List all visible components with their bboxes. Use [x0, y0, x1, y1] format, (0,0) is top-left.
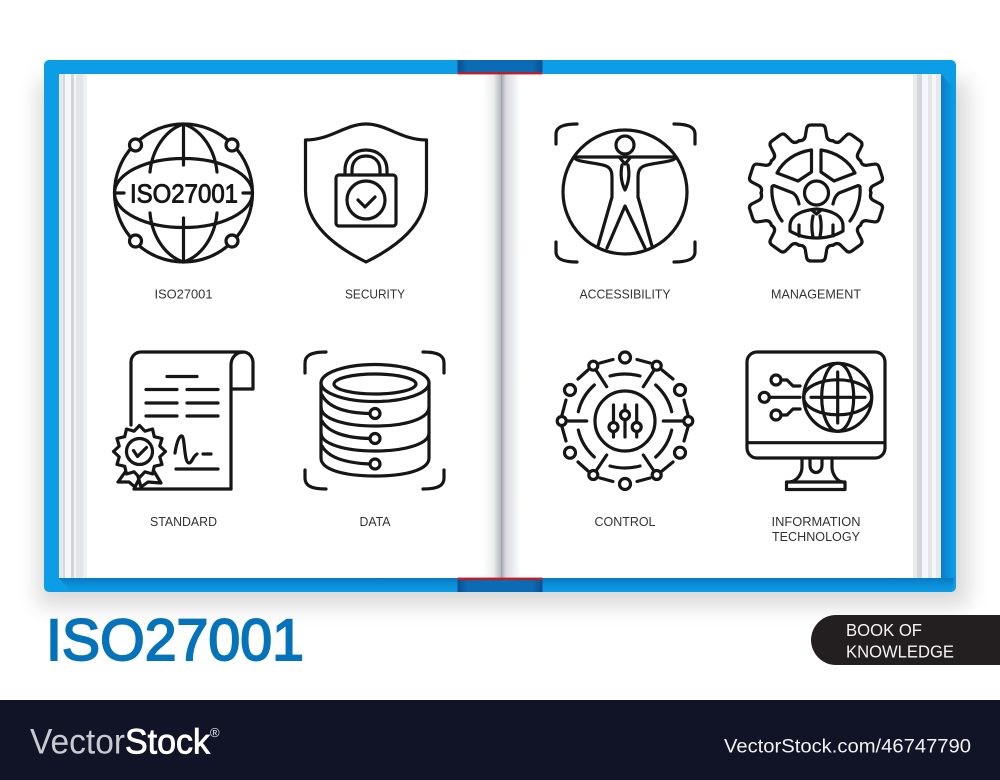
- label: control: CONTROL: [594, 515, 656, 529]
- title: ISO27001: [46, 608, 304, 673]
- book: [44, 60, 956, 592]
- icon: data cylinder: [305, 352, 444, 489]
- left page fold shadow: [482, 74, 501, 578]
- label: information technology: INFORMATION: [772, 515, 860, 529]
- label: security: SECURITY: [345, 288, 406, 302]
- blue cover: [44, 60, 956, 592]
- label: management: MANAGEMENT: [771, 288, 861, 302]
- right page stack: [913, 74, 941, 578]
- label: ISO27001: ISO27001: [154, 288, 213, 302]
- bottom spine band: [458, 578, 542, 592]
- icon: security shield with padlock: [306, 124, 426, 262]
- icon: information technology monitor: [747, 352, 885, 490]
- label: accessibility: ACCESSIBILITY: [580, 288, 671, 302]
- gear teeth: [746, 125, 886, 261]
- footer logo: ®: [210, 725, 220, 740]
- footer logo: Stock: [125, 722, 210, 762]
- right page fold shadow: [501, 74, 521, 578]
- pill: book of knowledge: BOOK OF: [846, 620, 922, 640]
- icon: standard document with badge: [114, 352, 253, 489]
- label: data: DATA: [360, 515, 391, 529]
- right inner cover shade: [941, 74, 954, 578]
- icon: ISO27001 globe: [114, 124, 252, 262]
- icon: control network: [557, 352, 693, 490]
- label: standard: STANDARD: [150, 515, 217, 529]
- footer bar: [0, 700, 1000, 780]
- right page: [501, 74, 913, 578]
- label: information technology: [772, 515, 861, 544]
- icon: accessibility figure: [556, 124, 695, 262]
- label: information technology: TECHNOLOGY: [772, 530, 861, 544]
- footer logo: [30, 722, 220, 762]
- book drop shadow: [38, 80, 968, 606]
- left page: [87, 74, 501, 578]
- top spine band: [458, 60, 542, 74]
- pill: book of knowledge: KNOWLEDGE: [846, 642, 954, 662]
- icon text: ISO27001: [130, 180, 238, 208]
- left page stack: [59, 74, 87, 578]
- footer image id: VectorStock.com/46747790: [724, 736, 971, 758]
- pill: book of knowledge: [811, 615, 1000, 665]
- icon: management gear: [746, 125, 886, 261]
- footer logo: Vector: [30, 722, 125, 762]
- certificate seal: [114, 426, 166, 478]
- certificate ribbons: [118, 468, 142, 487]
- bottom inner cover shade: [59, 578, 954, 592]
